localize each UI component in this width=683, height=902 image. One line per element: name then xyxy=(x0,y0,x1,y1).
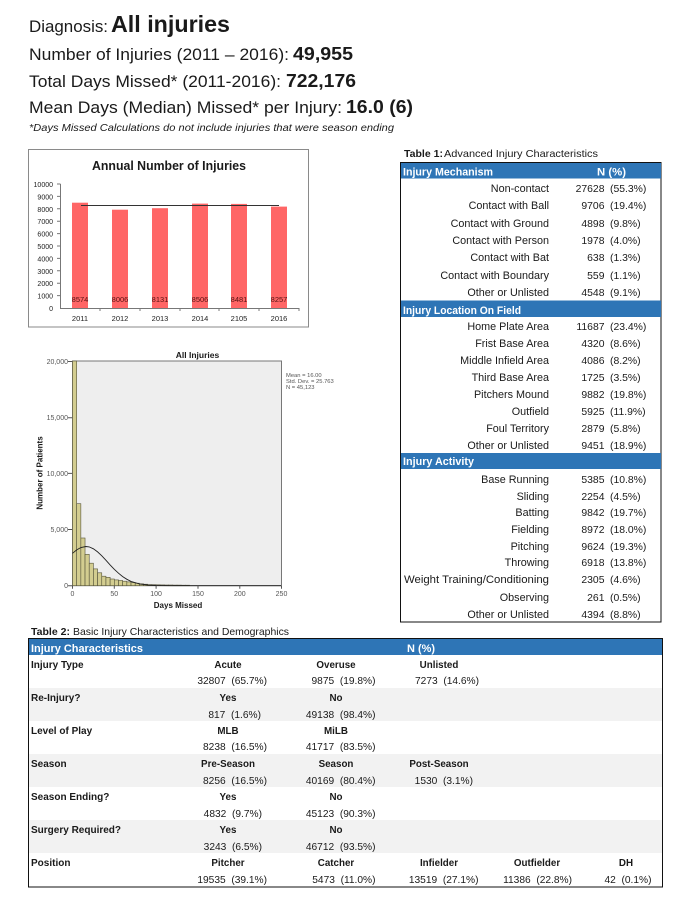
stat: mean and median days missed: 16.0 (6) xyxy=(346,97,413,117)
row: re-injury: 817 (1.6%) xyxy=(208,710,261,721)
rows: injury mechanism: 559 xyxy=(587,271,605,282)
rows: injury location on field: 1725 xyxy=(581,373,605,384)
row: surgery required: 46712 (93.5%) xyxy=(306,842,376,853)
summary statistics xyxy=(286,373,334,391)
year labels: 2016 xyxy=(271,314,287,323)
section header: injury mechanism: N (%) xyxy=(597,166,626,178)
rows: injury activity: (19.7%) xyxy=(610,508,646,519)
table 2 header: N (%) xyxy=(407,643,435,655)
rows: injury activity: 6918 xyxy=(581,558,605,569)
row: level of play: Level of Play xyxy=(31,726,93,737)
normal curve xyxy=(72,546,281,586)
rows: injury mechanism: (55.3%) xyxy=(610,184,646,195)
bar value labels: 8574 xyxy=(72,295,88,304)
rows: injury activity: 261 xyxy=(587,593,605,604)
rows: injury location on field xyxy=(460,321,646,452)
section header: injury activity: Injury Activity xyxy=(403,456,475,468)
year labels: 2105 xyxy=(231,314,247,323)
row: surgery required: Surgery Required? xyxy=(31,825,121,836)
row: re-injury: No xyxy=(329,693,343,704)
year labels xyxy=(72,314,287,323)
row: season ending: 45123 (90.3%) xyxy=(306,809,376,820)
summary statistics: Mean = 16.00 xyxy=(286,373,322,379)
section header: injury mechanism: Injury Mechanism xyxy=(403,166,493,178)
rows: injury mechanism: Non-contact xyxy=(491,183,549,195)
rows: injury location on field: 5925 xyxy=(581,407,605,418)
rows: injury mechanism: (1.3%) xyxy=(610,253,641,264)
row: re-injury: Re-Injury? xyxy=(31,693,80,704)
rows: injury activity: Sliding xyxy=(517,491,549,503)
row: position xyxy=(31,858,652,886)
row: injury type: Unlisted xyxy=(420,660,458,671)
rows: injury mechanism: Contact with Ground xyxy=(451,218,549,230)
histogram x axis: 50 xyxy=(110,591,118,598)
stat: mean and median days missed: Mean Days (Median) Missed* per Injury: xyxy=(29,98,342,117)
rows: injury mechanism: 4898 xyxy=(581,219,605,230)
row: injury type xyxy=(31,660,479,687)
row: season: Pre-Season xyxy=(201,759,255,770)
rows: injury location on field: (19.8%) xyxy=(610,390,646,401)
year labels: 2013 xyxy=(152,314,168,323)
rows: injury mechanism: Other or Unlisted xyxy=(467,287,549,299)
stat: total days missed: Total Days Missed* (2011-2016): xyxy=(29,72,281,91)
row: season ending xyxy=(31,792,376,820)
summary statistics: N = 45,123 xyxy=(286,385,315,391)
rows: injury location on field: Frist Base Area xyxy=(475,338,549,350)
section header: injury mechanism xyxy=(401,163,661,178)
histogram y axis: 5,000 xyxy=(50,527,68,534)
rows: injury location on field: 4086 xyxy=(581,356,605,367)
row: injury type: 7273 (14.6%) xyxy=(415,676,479,687)
rows: injury mechanism: (1.1%) xyxy=(610,271,641,282)
rows: injury activity: Other or Unlisted xyxy=(467,609,549,621)
summary statistics: Std. Dev. = 25.763 xyxy=(286,379,334,385)
table 2 caption: Basic Injury Characteristics and Demographics xyxy=(73,627,289,638)
row: re-injury xyxy=(31,693,376,721)
y axis: 4000 xyxy=(37,256,53,263)
rows: injury mechanism: (19.4%) xyxy=(610,201,646,212)
rows: injury activity: (19.3%) xyxy=(610,542,646,553)
year labels: 2012 xyxy=(112,314,128,323)
y axis: 1000 xyxy=(37,294,53,301)
title: Diagnosis: xyxy=(29,17,108,36)
rows: injury activity: 2254 xyxy=(581,492,605,503)
row: level of play: MiLB xyxy=(324,726,348,737)
rows: injury location on field: Pitchers Mound xyxy=(474,389,549,401)
y axis: 0 xyxy=(49,306,53,313)
rows: injury activity: Base Running xyxy=(481,474,549,486)
rows: injury mechanism: Contact with Ball xyxy=(469,200,549,212)
histogram x axis: 150 xyxy=(192,591,204,598)
rows: injury location on field: (8.6%) xyxy=(610,339,641,350)
rows: injury mechanism: 9706 xyxy=(581,201,605,212)
table 1 caption: Table 1: xyxy=(404,149,443,160)
row: season ending: 4832 (9.7%) xyxy=(204,809,262,820)
rows: injury mechanism: Contact with Person xyxy=(452,235,549,247)
rows: injury location on field: 11687 xyxy=(576,322,605,333)
bar value labels: 8006 xyxy=(112,295,128,304)
rows: injury mechanism xyxy=(440,183,646,299)
row: re-injury: 49138 (98.4%) xyxy=(306,710,376,721)
rows: injury location on field: 9882 xyxy=(581,390,605,401)
section header: injury activity xyxy=(401,453,661,469)
histogram y axis xyxy=(47,359,72,590)
row: position: 42 (0.1%) xyxy=(604,875,652,886)
row: re-injury: Yes xyxy=(220,693,237,704)
bar value labels: 8506 xyxy=(192,295,208,304)
histogram y axis: 20,000 xyxy=(47,359,68,366)
row: position: 19535 (39.1%) xyxy=(197,875,267,886)
rows: injury activity: 9624 xyxy=(581,542,605,553)
row: level of play: 8238 (16.5%) xyxy=(203,742,267,753)
panel: days missed histogram xyxy=(36,350,334,610)
rows: injury location on field: Foul Territory xyxy=(486,423,550,435)
panel: annual number of injuries bar chart xyxy=(28,150,308,327)
row: surgery required: No xyxy=(329,825,343,836)
y axis title: Number of Patients xyxy=(36,436,44,510)
rows: injury activity: 8972 xyxy=(581,525,605,536)
y axis: 5000 xyxy=(37,244,53,251)
row: season ending: Yes xyxy=(220,792,237,803)
row: position: 5473 (11.0%) xyxy=(312,875,376,886)
rows: injury activity: (8.8%) xyxy=(610,610,641,621)
title: All injuries xyxy=(111,11,230,37)
y axis: 10000 xyxy=(34,182,53,189)
histogram x axis: 200 xyxy=(234,591,246,598)
mean line xyxy=(81,204,279,206)
rows: injury activity: Observing xyxy=(500,592,549,604)
row: injury type: Injury Type xyxy=(31,660,84,671)
histogram x axis: 250 xyxy=(276,591,287,598)
y axis: 9000 xyxy=(37,194,53,201)
plot area xyxy=(72,361,282,586)
y axis xyxy=(34,182,299,313)
histogram x axis: 100 xyxy=(150,591,162,598)
rows: injury activity: Throwing xyxy=(505,557,549,569)
y axis: 3000 xyxy=(37,269,53,276)
row: season ending: No xyxy=(329,792,343,803)
rows: injury activity: (4.6%) xyxy=(610,575,641,586)
rows: injury mechanism: Contact with Bat xyxy=(470,252,549,264)
rows: injury activity: (13.8%) xyxy=(610,558,646,569)
header block xyxy=(29,11,413,134)
table 2 header: Injury Characteristics xyxy=(31,643,143,655)
y axis: 7000 xyxy=(37,219,53,226)
rows: injury mechanism: (4.0%) xyxy=(610,236,641,247)
rows: injury activity: 9842 xyxy=(581,508,605,519)
bar value labels: 8131 xyxy=(152,295,168,304)
histogram y axis: 10,000 xyxy=(47,471,68,478)
row: injury type: 32807 (65.7%) xyxy=(197,676,267,687)
rows: injury mechanism: (9.1%) xyxy=(610,288,641,299)
rows: injury activity xyxy=(404,474,646,621)
rows: injury mechanism: 27628 xyxy=(576,184,605,195)
rows: injury activity: 2305 xyxy=(581,575,605,586)
year labels: 2014 xyxy=(192,314,208,323)
row: injury type: Acute xyxy=(214,660,242,671)
histogram y axis: 0 xyxy=(64,583,68,590)
row: level of play xyxy=(31,726,376,753)
stat: number of injuries: 49,955 xyxy=(293,44,353,64)
bars xyxy=(72,203,287,308)
row: season: 1530 (3.1%) xyxy=(415,776,473,787)
table 1 caption: Advanced Injury Characteristics xyxy=(444,149,598,160)
rows: injury activity: (18.0%) xyxy=(610,525,646,536)
row: injury type: 9875 (19.8%) xyxy=(312,676,376,687)
y axis: 8000 xyxy=(37,207,53,214)
row: surgery required: 3243 (6.5%) xyxy=(204,842,262,853)
rows: injury activity: (10.8%) xyxy=(610,475,646,486)
panel: table 2 basic injury characteristics xyxy=(28,638,662,887)
panel: table 1 advanced injury characteristics xyxy=(400,162,661,622)
year labels: 2011 xyxy=(72,314,88,323)
rows: injury location on field: (3.5%) xyxy=(610,373,641,384)
section header: injury location on field xyxy=(401,300,661,317)
row: season xyxy=(31,759,473,787)
row: position: Infielder xyxy=(420,858,458,869)
section header: injury location on field: Injury Location On Field xyxy=(403,305,521,317)
rows: injury mechanism: 4548 xyxy=(581,288,605,299)
rows: injury location on field: (5.8%) xyxy=(610,424,641,435)
row: position: Pitcher xyxy=(211,858,245,869)
histogram x axis: 0 xyxy=(71,591,75,598)
row: position: Catcher xyxy=(318,858,354,869)
rows: injury location on field: Home Plate Area xyxy=(467,321,549,333)
x axis title: Days Missed xyxy=(154,601,202,610)
row: season: Season xyxy=(319,759,353,770)
y axis: 6000 xyxy=(37,232,53,239)
rows: injury location on field: Middle Infield Area xyxy=(460,355,549,367)
rows: injury location on field: 9451 xyxy=(581,441,605,452)
rows: injury location on field: Third Base Area xyxy=(472,372,549,384)
rows: injury location on field: (23.4%) xyxy=(610,322,646,333)
rows: injury activity: Pitching xyxy=(511,541,549,553)
footnote: *Days Missed Calculations do not include injuries that were season ending xyxy=(29,122,394,134)
row: position: DH xyxy=(619,858,633,869)
stat: number of injuries: Number of Injuries (2011 – 2016): xyxy=(29,45,289,64)
rows: injury location on field: 2879 xyxy=(581,424,605,435)
row: position: Position xyxy=(31,858,70,869)
rows: injury location on field: (11.9%) xyxy=(610,407,646,418)
rows: injury activity: Fielding xyxy=(511,524,549,536)
row: surgery required: Yes xyxy=(220,825,237,836)
histogram y axis: 15,000 xyxy=(47,415,68,422)
table 2 caption: Table 2: xyxy=(31,627,70,638)
row: position: 11386 (22.8%) xyxy=(503,875,572,886)
row: surgery required xyxy=(31,825,376,853)
rows: injury mechanism: 638 xyxy=(587,253,605,264)
row: season: 40169 (80.4%) xyxy=(306,776,376,787)
row: season ending: Season Ending? xyxy=(31,792,109,803)
rows: injury location on field: Outfield xyxy=(512,406,549,418)
rows: injury location on field: 4320 xyxy=(581,339,605,350)
bar value labels: 8481 xyxy=(231,295,247,304)
rows: injury activity: Weight Training/Conditioning xyxy=(404,574,549,586)
rows: injury mechanism: (9.8%) xyxy=(610,219,641,230)
bar value labels: 8257 xyxy=(271,295,287,304)
rows: injury mechanism: 1978 xyxy=(581,236,605,247)
rows: injury activity: (4.5%) xyxy=(610,492,641,503)
rows: injury activity: 5385 xyxy=(581,475,605,486)
title xyxy=(29,11,230,37)
row: season: 8256 (16.5%) xyxy=(203,776,267,787)
rows: injury activity: 4394 xyxy=(581,610,605,621)
histogram bars xyxy=(72,361,190,586)
bar value labels xyxy=(72,295,287,304)
y axis: 2000 xyxy=(37,281,53,288)
row: level of play: 41717 (83.5%) xyxy=(306,742,376,753)
row: season: Season xyxy=(31,759,67,770)
rows: injury location on field: (18.9%) xyxy=(610,441,646,452)
rows: injury location on field: (8.2%) xyxy=(610,356,641,367)
row: position: Outfielder xyxy=(514,858,560,869)
row: season: Post-Season xyxy=(409,759,469,770)
rows: injury activity: Batting xyxy=(515,507,549,519)
chart title: Annual Number of Injuries xyxy=(92,159,246,173)
rows: injury activity: (0.5%) xyxy=(610,593,641,604)
stat: total days missed: 722,176 xyxy=(286,71,356,91)
row: position: 13519 (27.1%) xyxy=(409,875,478,886)
histogram title: All Injuries xyxy=(176,350,219,360)
row shading xyxy=(29,688,662,853)
rows: injury location on field: Other or Unlisted xyxy=(467,440,549,452)
table 2 header xyxy=(29,639,662,655)
histogram x axis xyxy=(71,586,287,598)
rows: injury mechanism: Contact with Boundary xyxy=(440,270,550,282)
row: injury type: Overuse xyxy=(316,660,356,671)
row: level of play: MLB xyxy=(217,726,239,737)
